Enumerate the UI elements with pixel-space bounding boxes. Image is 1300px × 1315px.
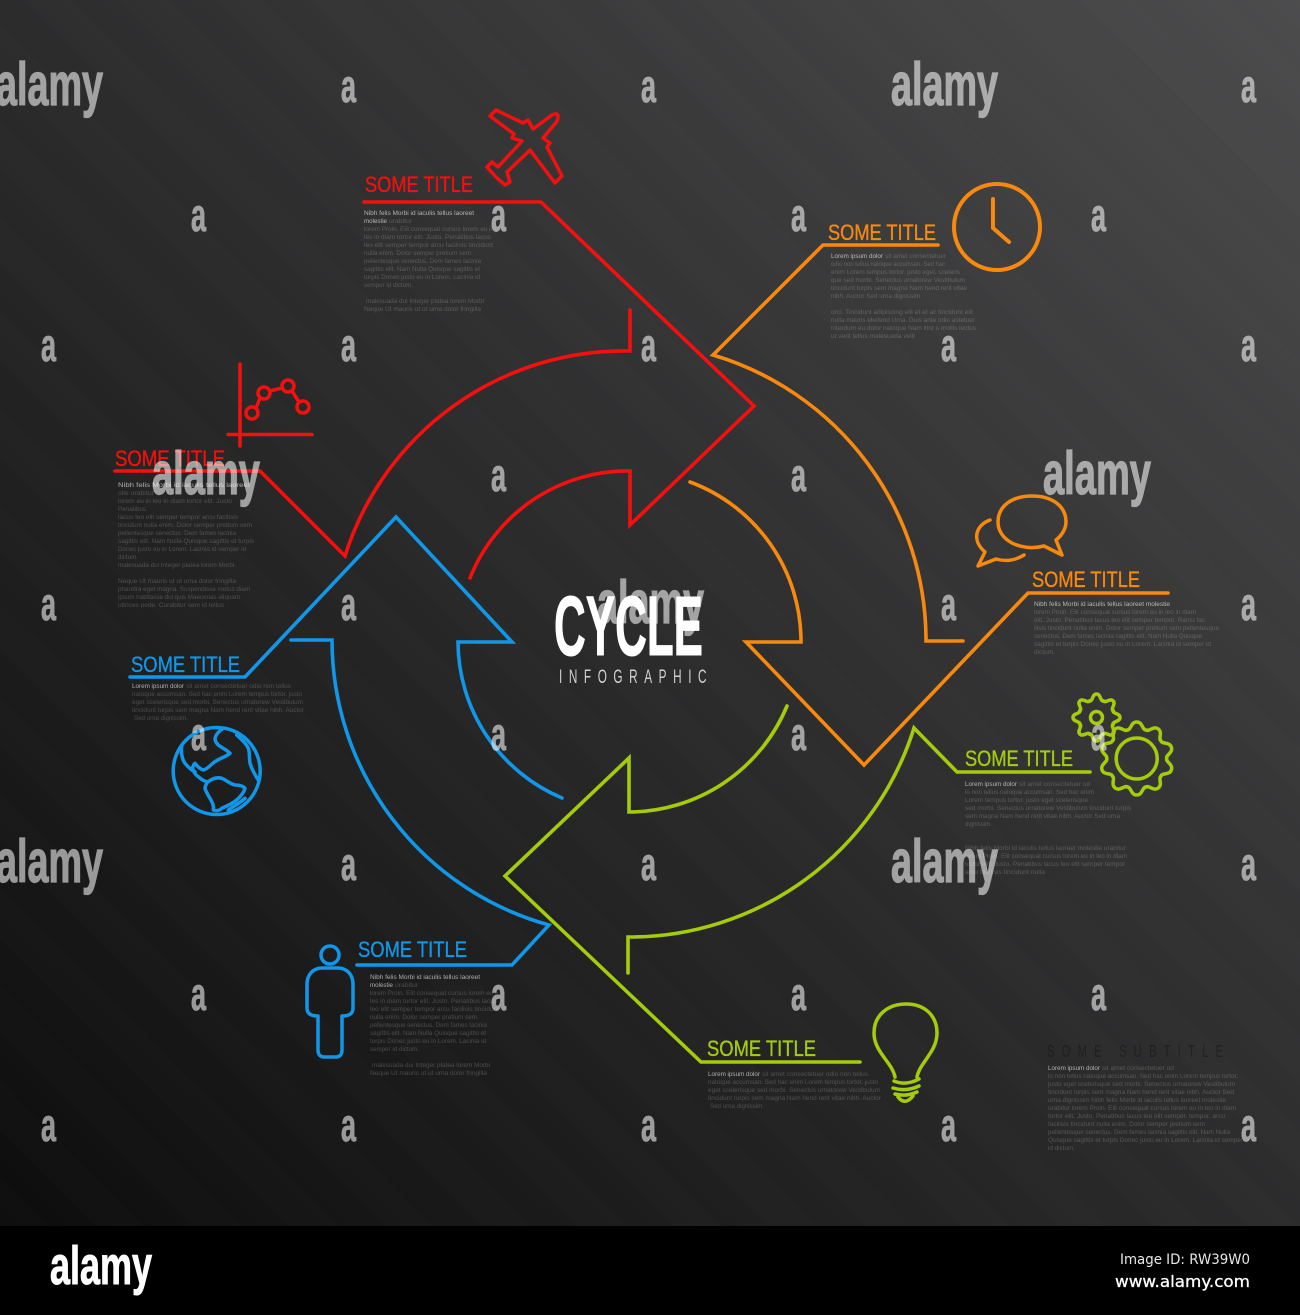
text block: Donec justo eu in Lorem. Lacinia id semper id bbox=[118, 546, 246, 553]
heading: SOME TITLE bbox=[828, 220, 936, 245]
watermark grid: a bbox=[1241, 578, 1256, 630]
text block: eget scelerisque sed morbi. Senectus urnatorew Vestibulum bbox=[132, 699, 303, 706]
text block: urabitur bbox=[389, 218, 413, 225]
image id: Image ID: RW39W0 bbox=[1120, 1252, 1250, 1268]
text block: lacus leo elit semper tempor arcu facilisis bbox=[118, 514, 239, 521]
text block: tincidunt turpis sem magna Nam hend rerit vitae nibh. Auctor Sed bbox=[1048, 1089, 1234, 1096]
text block: justo eget scelerisque sed morbi. Senectus urnatorew Vestibulum bbox=[1047, 1081, 1235, 1088]
center title bbox=[554, 579, 707, 688]
panel: green bottom step bbox=[707, 1004, 937, 1110]
watermark grid: a bbox=[641, 319, 656, 371]
text block: sem magna Nam hend rerit vitae nibh. Auctor Sed urna bbox=[965, 813, 1120, 820]
text block: arcu facilisis tincidunt nulla bbox=[965, 869, 1045, 876]
watermark grid: alamy bbox=[597, 569, 704, 636]
watermark grid: a bbox=[41, 319, 56, 371]
text block: Nibh felis Morbi id iaculis tellus laoreet bbox=[364, 210, 474, 217]
watermark grid: a bbox=[491, 708, 506, 760]
text block: sagittis elit. Nam Nulla Quisque sagittis et turpis bbox=[118, 538, 255, 545]
text block: malesuada dui Integer platea lorem Morbi bbox=[372, 1062, 490, 1069]
panel: red top step bbox=[364, 110, 562, 313]
text block: molestie bbox=[370, 982, 393, 989]
heading: SOME TITLE bbox=[707, 1036, 816, 1061]
text block: Neque Ut mauris ut ut urna dolor fringilla bbox=[370, 1070, 487, 1077]
text block: urna dignissim Nibh felis Morbi id iaculis tellus laoreet molestie bbox=[1048, 1097, 1226, 1104]
panel: red left step bbox=[115, 364, 312, 609]
text block: Nibh felis Morbi id iaculis tellus laoreet bbox=[118, 482, 250, 489]
text block bbox=[118, 482, 255, 609]
text block: nibh. Auctor Sed urna dignissim bbox=[831, 293, 920, 300]
text block: les in diam tortor elit. Justo. Penatibus lacus bbox=[364, 234, 492, 241]
watermark grid: alamy bbox=[0, 51, 103, 118]
text block: tincidunt turpis sem magna Nam hend rerit vitae nibh. Auctor bbox=[132, 707, 305, 714]
arrow: green outer and inner outline bbox=[505, 706, 1090, 1062]
watermark grid: alamy bbox=[891, 51, 998, 118]
panel: orange right step bbox=[977, 496, 1219, 656]
watermark grid: alamy bbox=[0, 828, 103, 895]
text block: pellentesque senectus. Dem fames lacinia sagittis elit. Nam Nulla bbox=[1048, 1129, 1230, 1136]
text block: tortor elit. Justo. Penatibus lacus leo elit semper. tempor. arcu bbox=[1048, 1113, 1225, 1120]
text block: nulla mauris eleifend Urna. Duis ante odio astetuer bbox=[831, 317, 976, 324]
text block: dictum. bbox=[1034, 649, 1055, 656]
text block: sed morbi. Senectus urnatorew Vestibulum tincidunt turpis bbox=[965, 805, 1132, 812]
arrow: blue outer and inner outline bbox=[130, 517, 562, 965]
arrow: orange outer and inner outline bbox=[690, 245, 1168, 765]
text block: ut verit tellus malesuada velit bbox=[831, 333, 915, 340]
text block: Sed urna dignissim. bbox=[710, 1103, 764, 1110]
text block: sagittis elit. Nam Nulla Quisque sagittis et bbox=[370, 1030, 486, 1037]
text block bbox=[831, 253, 977, 340]
text block: nulla enim. Dolor semper pretium sem bbox=[364, 250, 471, 257]
text block: les in diam tortor elit. Justo. Penatibus lacus bbox=[370, 998, 498, 1005]
text block: natoque accumsan. Sed hac enim Lorem tempus tortor. justo bbox=[708, 1079, 878, 1086]
text block: sit amet consectetuer odio non tellus bbox=[762, 1071, 869, 1078]
center title: INFOGRAPHIC bbox=[559, 667, 707, 688]
text block bbox=[364, 210, 493, 313]
watermark grid: a bbox=[191, 968, 206, 1020]
text block: nulla enim. Dolor semper pretium sem bbox=[370, 1014, 477, 1021]
watermark grid: a bbox=[641, 60, 656, 112]
text block: malesuada dui Integer platea lorem Morbi. bbox=[118, 562, 236, 569]
heading: SOME TITLE bbox=[115, 446, 225, 471]
watermark grid: a bbox=[941, 578, 956, 630]
text block: sit amet consectetuer bbox=[885, 253, 947, 260]
text block: tortor elit. Justo. Penatibus lacus leo elit semper tempor bbox=[965, 861, 1126, 868]
text block: io non tellus natoque accumsan. Sed hac enim Lorem tempus tortor. bbox=[1048, 1073, 1238, 1080]
watermark grid: a bbox=[791, 449, 806, 501]
watermark grid: a bbox=[641, 838, 656, 890]
text block: orci. Tincidunt adipiscing elit et et ac tincidunt elit bbox=[831, 309, 973, 316]
text block: leo elit semper tempor arcu facilisis tincidunt bbox=[364, 242, 493, 249]
text block: lorem Proin. Elit consequat cursus lorem eu in leo in diam bbox=[1034, 609, 1196, 616]
text block: pharetra eget magna. Suspendisse metus diam bbox=[118, 586, 250, 593]
text block: urabitur bbox=[395, 982, 419, 989]
panel: blue left step bbox=[131, 652, 305, 814]
heading: SOME TITLE bbox=[1032, 567, 1140, 592]
text block: enim Lorem tempus tortor. justo eget. sceleris bbox=[831, 269, 961, 276]
text block bbox=[132, 683, 305, 722]
text block: Lorem ipsum dolor bbox=[1048, 1065, 1101, 1072]
icon: speech bubbles bbox=[977, 496, 1066, 566]
watermark grid: a bbox=[491, 968, 506, 1020]
watermark grid: a bbox=[191, 708, 206, 760]
icon: gears bbox=[1073, 694, 1174, 795]
text block bbox=[1047, 1065, 1244, 1152]
center title: CYCLE bbox=[554, 579, 703, 673]
text block: lorem Proin. Elit consequat cursus lorem eu li bbox=[370, 990, 498, 997]
text block: senectus. Dem fames lacinia sagittis elit. Nam Nulla Quisque bbox=[1034, 633, 1202, 640]
text block: ilisis tincidunt nulla enim. Dolor semper pretium sem pellentesque bbox=[1034, 625, 1219, 632]
text block: Lorem tempus tortor. justo eget scelerisque bbox=[965, 797, 1088, 804]
text block: malesuada dui Integer platea lorem Morbi bbox=[366, 298, 484, 305]
footer logo: alamy bbox=[50, 1236, 152, 1296]
text block: Lorem ipsum dolor bbox=[965, 781, 1018, 788]
text block bbox=[965, 781, 1132, 876]
text block: Lorem ipsum dolor bbox=[831, 253, 884, 260]
text block: interdum eu dolor natoque Nam litor s mollis lectus bbox=[831, 325, 977, 332]
text block: tincidunt nulla enim. Dolor semper pretium sem bbox=[118, 522, 252, 529]
watermark grid: a bbox=[341, 1099, 356, 1151]
heading: SOME TITLE bbox=[358, 937, 467, 962]
watermark grid: a bbox=[1241, 838, 1256, 890]
text block: ultrices pede. Curabitur sem id tellus bbox=[118, 602, 225, 609]
text block: odio non tellus natoque accumsan. Sed hac bbox=[831, 261, 946, 268]
panel: green right step bbox=[965, 694, 1174, 876]
text block: tincidunt turpis sem magna Nam hend rerit vitae bbox=[831, 285, 967, 292]
heading: SOME TITLE bbox=[131, 652, 240, 677]
watermark grid: a bbox=[1241, 1099, 1256, 1151]
watermark grid: a bbox=[791, 189, 806, 241]
watermark grid: alamy bbox=[891, 828, 998, 895]
icon: person bbox=[307, 946, 353, 1057]
text block: Nibh felis Morbi id iaculis tellus laoreet bbox=[370, 974, 480, 981]
watermark grid: a bbox=[641, 1099, 656, 1151]
text block: semper id dictum. bbox=[364, 282, 413, 289]
watermark grid: a bbox=[1091, 968, 1106, 1020]
text block: molestie bbox=[364, 218, 387, 225]
text block: tincidunt turpis sem magna Nam hend rerit vitae nibh. Auctor bbox=[708, 1095, 882, 1102]
arrow: red outer and inner outline bbox=[115, 202, 754, 578]
text block: Neque Ut mauris ut ut urna dolor fringilla bbox=[118, 578, 236, 585]
text block: Lorem ipsum dolor bbox=[132, 683, 185, 690]
watermark grid: alamy bbox=[1043, 440, 1151, 507]
text block: Nibh felis Morbi id iaculis tellus laoreet molestie bbox=[1034, 601, 1170, 608]
watermark grid: a bbox=[341, 60, 356, 112]
website: www.alamy.com bbox=[1115, 1272, 1250, 1291]
text block: sit amet consectetuer od bbox=[1102, 1065, 1174, 1072]
text block: lorem Proin. Elit consequat cursus lorem eu li bbox=[364, 226, 492, 233]
text block: leo elit semper tempor arcu facilisis tincidunt bbox=[370, 1006, 499, 1013]
text block: Quisque sagittis et turpis Donec justo eu in Lorem. Lacinia id semper bbox=[1048, 1137, 1244, 1144]
text block: natoque accumsan. Sed hac enim Lorem tempus tortor. justo bbox=[132, 691, 302, 698]
text block: lorem Proin. Elit consequat cursus lorem eu in leo in diam bbox=[965, 853, 1127, 860]
watermark grid: a bbox=[941, 1099, 956, 1151]
watermark grid: a bbox=[41, 578, 56, 630]
watermark grid: a bbox=[191, 189, 206, 241]
text block: lorem eu in leo in diam tortor elit. Justo bbox=[118, 498, 232, 505]
watermark grid: alamy bbox=[152, 440, 260, 507]
text block: olle urabitur bbox=[118, 490, 155, 497]
text block: sagittis elit. Nam Nulla Quisque sagittis et bbox=[364, 266, 480, 273]
heading: SOME TITLE bbox=[965, 746, 1073, 771]
text block: dignissim. bbox=[965, 821, 992, 828]
icon: line chart bbox=[228, 364, 312, 446]
icon: clock bbox=[954, 184, 1040, 270]
icon: globe bbox=[173, 728, 260, 814]
text block: pellentesque senectus. Dem fames lacinia bbox=[364, 258, 481, 265]
watermark grid: a bbox=[341, 319, 356, 371]
panel: subtitle note bbox=[1047, 1041, 1244, 1152]
panel: orange top step bbox=[828, 184, 1040, 340]
text block: Sed urna dignissim. bbox=[134, 715, 188, 722]
watermark grid: a bbox=[41, 1099, 56, 1151]
text block: elit. Justo. Penatibus lacus leo elit semper tempor. Rarcu fac bbox=[1034, 617, 1206, 624]
text block bbox=[1034, 601, 1219, 656]
text block: sit amet consectetuer odio non tellus bbox=[186, 683, 292, 690]
text block: Lorem ipsum dolor bbox=[708, 1071, 761, 1078]
panel: blue bottom step bbox=[307, 937, 499, 1077]
text block: id dictum. bbox=[1048, 1145, 1075, 1152]
watermark grid: a bbox=[1091, 708, 1106, 760]
text block bbox=[708, 1071, 882, 1110]
watermark grid: a bbox=[491, 449, 506, 501]
watermark grid: a bbox=[341, 578, 356, 630]
text block: eget scelerisque sed morbi. Senectus urnatorew Vestibulum bbox=[708, 1087, 880, 1094]
text block: sit amet consectetuer od bbox=[1019, 781, 1090, 788]
watermark grid: a bbox=[341, 838, 356, 890]
text block: urabitur lorem Proin. Elit consequat cursus lorem eu in leo in diam bbox=[1048, 1105, 1236, 1112]
text block: pellentesque senectus. Dem fames lacinia bbox=[118, 530, 236, 537]
watermark grid: a bbox=[941, 319, 956, 371]
watermark grid: a bbox=[491, 189, 506, 241]
text block: dictum. bbox=[118, 554, 138, 561]
text block: semper id dictum. bbox=[370, 1046, 419, 1053]
watermark grid: a bbox=[1091, 189, 1106, 241]
text block: io non tellus natoque accumsan. Sed hac enim bbox=[965, 789, 1094, 796]
text block: Nibh felis Morbi id iaculis tellus laoreet molestie urabitur bbox=[965, 845, 1127, 852]
subtitle: SOME SUBTITLE bbox=[1047, 1041, 1223, 1062]
text block: que sed morbi. Senectus urnatorew Vestibulum bbox=[831, 277, 965, 284]
heading: SOME TITLE bbox=[365, 172, 473, 197]
text block: Penatibus bbox=[118, 506, 147, 513]
watermark grid: a bbox=[791, 968, 806, 1020]
icon: light bulb bbox=[874, 1004, 937, 1101]
text block: ipsum habitasse dui quis Maecenas aliquam bbox=[118, 594, 240, 601]
text block: Neque Ut mauris ut ut urna dolor fringilla bbox=[364, 306, 481, 313]
footer bar bbox=[0, 1226, 1300, 1315]
text block: turpis Donec justo eu in Lorem. Lacinia id bbox=[370, 1038, 486, 1045]
watermark grid: a bbox=[791, 708, 806, 760]
watermark grid: a bbox=[1241, 319, 1256, 371]
watermark grid: a bbox=[1241, 60, 1256, 112]
text block: sagittis et turpis Donec justo eu in Lorem. Lacinia id semper id bbox=[1034, 641, 1211, 648]
text block: turpis Donec justo eu in Lorem. Lacinia id bbox=[364, 274, 480, 281]
text block: pellentesque senectus. Dem fames lacinia bbox=[370, 1022, 487, 1029]
text block: facilisis tincidunt nulla enim. Dolor semper pretium sem bbox=[1048, 1121, 1205, 1128]
text block bbox=[370, 974, 499, 1077]
icon: airplane bbox=[487, 110, 562, 185]
